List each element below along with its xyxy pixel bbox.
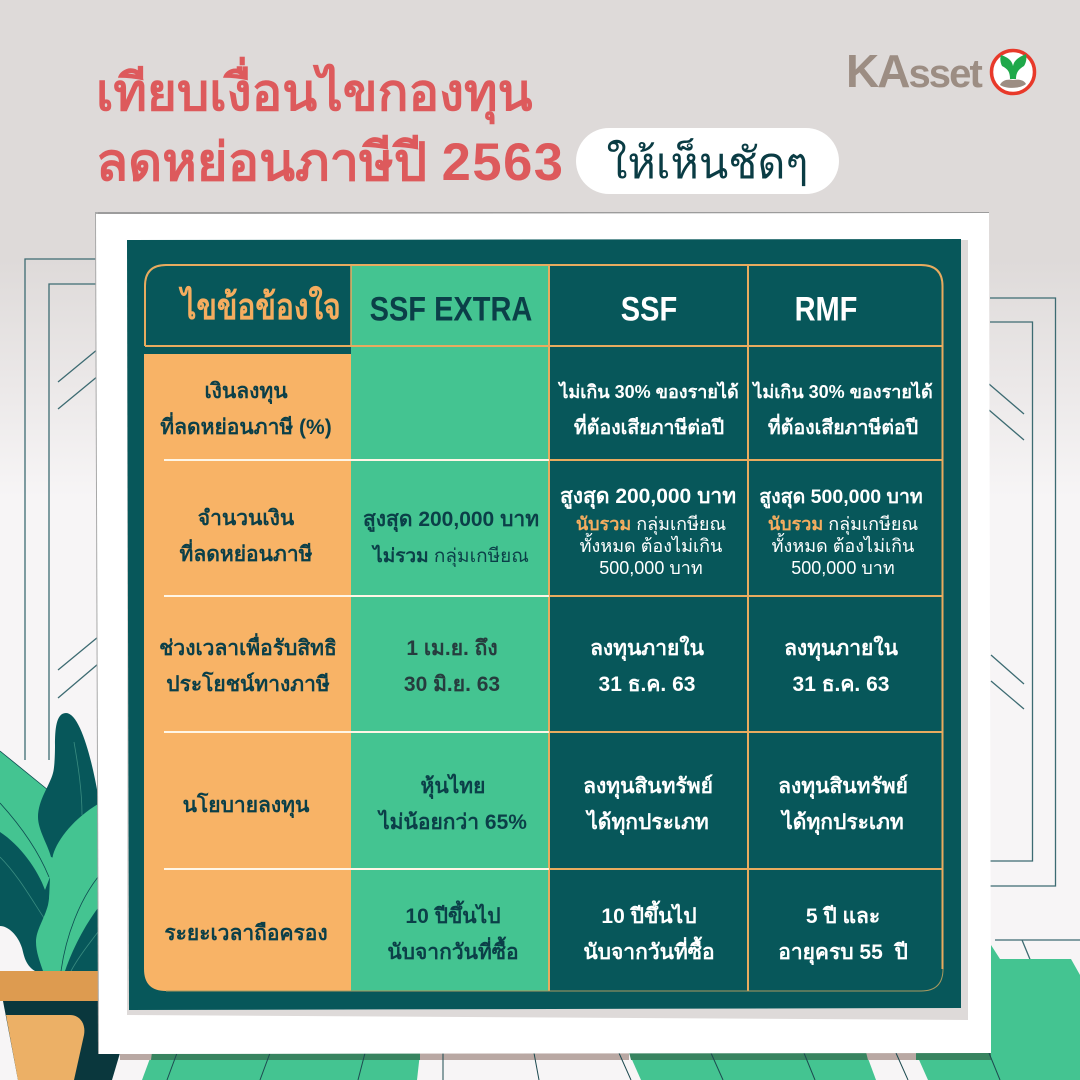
comparison table: ไม่เกิน 30% ของรายได้	[753, 382, 933, 402]
comparison table: ลงทุนภายใน	[590, 637, 704, 660]
subtitle pill	[576, 128, 839, 194]
logo: KAsset: KAsset	[846, 45, 981, 97]
row 1: เงินลงทุนที่ลดหย่อนภาษี (%)	[160, 380, 332, 439]
comparison table: นับรวม กลุ่มเกษียณ	[576, 514, 726, 534]
comparison table: ไม่เกิน 30% ของรายได้	[559, 382, 739, 402]
row 5: ระยะเวลาถือครอง: ระยะเวลาถือครอง	[164, 922, 328, 945]
comparison table: นับจากวันที่ซื้อ	[387, 941, 519, 964]
row 4: นโยบายลงทุน: นโยบายลงทุน	[183, 794, 309, 817]
row 1: เงินลงทุนที่ลดหย่อนภาษี (%): ที่ลดหย่อนภาษี (%)	[160, 416, 332, 439]
flower pot	[0, 971, 120, 1080]
comparison table: SSF EXTRA	[370, 291, 532, 329]
comparison table: RMF	[795, 291, 857, 329]
comparison table: ไม่น้อยกว่า 65%	[379, 811, 527, 834]
title: เทียบเงื่อนไขกองทุน	[96, 64, 533, 121]
comparison table: 31 ธ.ค. 63	[793, 673, 889, 696]
comparison table: สูงสุด 500,000 บาท	[759, 486, 923, 508]
comparison table: 10 ปีขึ้นไป	[405, 905, 501, 928]
comparison table: 5 ปี และ	[806, 905, 880, 928]
comparison table: ได้ทุกประเภท	[782, 811, 904, 834]
row 3: ช่วงเวลาเพื่อรับสิทธิประโยชน์ทางภาษี: ประโยชน์ทางภาษี	[166, 673, 330, 696]
comparison table: นับรวม กลุ่มเกษียณ	[768, 514, 918, 534]
comparison table: 31 ธ.ค. 63	[599, 673, 695, 696]
white card	[95, 212, 991, 1054]
comparison table: ได้ทุกประเภท	[587, 811, 709, 834]
comparison table: ลงทุนสินทรัพย์	[778, 775, 908, 798]
row 2: จำนวนเงินที่ลดหย่อนภาษี: จำนวนเงิน	[198, 507, 294, 530]
comparison table: หุ้นไทย	[421, 775, 485, 798]
comparison table: SSF	[621, 291, 677, 329]
row 2: จำนวนเงินที่ลดหย่อนภาษี	[180, 507, 312, 566]
comparison table: 30 มิ.ย. 63	[404, 673, 500, 696]
row 1: เงินลงทุนที่ลดหย่อนภาษี (%): เงินลงทุน	[204, 380, 288, 403]
plant	[0, 713, 98, 971]
row 3: ช่วงเวลาเพื่อรับสิทธิประโยชน์ทางภาษี	[159, 633, 337, 696]
comparison table: 1 เม.ย. ถึง	[406, 637, 498, 660]
comparison table: 500,000 บาท	[599, 558, 703, 578]
comparison table: 500,000 บาท	[791, 558, 895, 578]
comparison table: ลงทุนสินทรัพย์	[583, 775, 713, 798]
comparison table: 10 ปีขึ้นไป	[601, 905, 697, 928]
comparison table: ไม่รวม กลุ่มเกษียณ	[373, 546, 529, 567]
comparison table: อายุครบ 55 ปี	[778, 941, 908, 964]
title	[96, 56, 564, 192]
comparison table: สูงสุด 200,000 บาท	[363, 508, 539, 531]
row 2: จำนวนเงินที่ลดหย่อนภาษี: ที่ลดหย่อนภาษี	[180, 543, 312, 566]
icon: sprout in red circle	[990, 48, 1036, 96]
comparison table: ลงทุนภายใน	[784, 637, 898, 660]
header cells: ไขข้อข้องใจ	[181, 288, 341, 327]
comparison table: ที่ต้องเสียภาษีต่อปี	[574, 417, 724, 439]
comparison table: สูงสุด 200,000 บาท	[560, 485, 736, 508]
comparison table: ทั้งหมด ต้องไม่เกิน	[772, 536, 914, 556]
floor	[120, 945, 1080, 1080]
comparison table: ทั้งหมด ต้องไม่เกิน	[580, 536, 722, 556]
row 3: ช่วงเวลาเพื่อรับสิทธิประโยชน์ทางภาษี: ช่วงเวลาเพื่อรับสิทธิ	[159, 637, 337, 660]
table cell backgrounds	[144, 264, 944, 992]
title: ลดหย่อนภาษีปี 2563	[96, 133, 564, 192]
comparison table: ที่ต้องเสียภาษีต่อปี	[768, 417, 918, 439]
comparison table	[144, 264, 944, 992]
comparison table: นับจากวันที่ซื้อ	[583, 941, 715, 964]
subtitle pill: ให้เห็นชัดๆ	[606, 140, 808, 188]
